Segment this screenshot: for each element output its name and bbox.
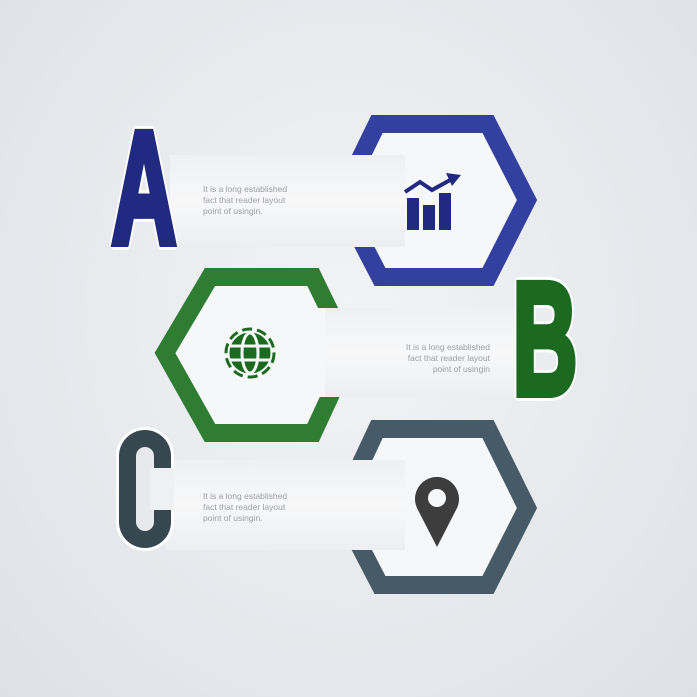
panel: B [165,251,577,433]
text A: fact that reader layout [203,195,286,205]
text C: It is a long established [203,491,287,501]
text A: It is a long established [203,184,287,194]
letter C [116,427,174,551]
text A: point of usingin. [203,206,263,216]
panel: A [112,100,527,278]
text C: point of usingin. [203,513,263,523]
letter B: B [513,251,577,429]
letter A: A [112,100,176,278]
text B: point of usingin [433,364,490,374]
panel: C [116,427,527,585]
text C: fact that reader layout [203,502,286,512]
icon: globe [226,329,274,377]
letter A: A [112,100,176,278]
text B: It is a long established [406,342,490,352]
icon: pin [415,477,459,547]
icon: chart [405,173,461,230]
letter B: B [513,251,577,429]
text B: fact that reader layout [408,353,491,363]
